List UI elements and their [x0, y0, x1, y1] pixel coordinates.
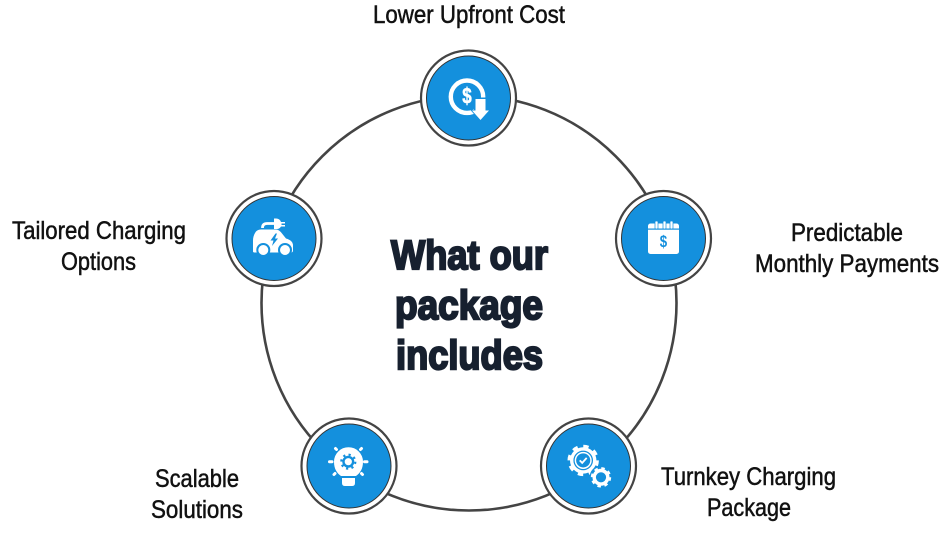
node: turnkey charging package [541, 418, 636, 514]
icon: gears with check [569, 446, 612, 489]
center title [391, 232, 548, 378]
label: predictable monthly payments [755, 219, 939, 278]
label: lower upfront cost: Lower Upfront Cost [373, 1, 565, 29]
icon: dollar with down arrow: $ [462, 84, 472, 109]
label: scalable solutions: Solutions [151, 496, 243, 524]
center title: package [395, 282, 543, 328]
label: turnkey charging package [661, 463, 836, 522]
center title: includes [396, 332, 543, 378]
large connecting circle [262, 96, 676, 510]
node: scalable solutions [302, 418, 396, 514]
label: tailored charging options [12, 217, 186, 276]
label: scalable solutions: Scalable [155, 465, 239, 493]
label: predictable monthly payments: Predictable [791, 219, 903, 247]
label: tailored charging options: Tailored Charging [12, 217, 186, 245]
icon: electric car with plug [253, 218, 293, 256]
label: tailored charging options: Options [61, 248, 136, 276]
node: predictable monthly payments [616, 191, 711, 286]
node: lower upfront cost [421, 50, 516, 146]
node: tailored charging options [226, 191, 322, 286]
label: turnkey charging package: Package [707, 494, 791, 522]
icon: calendar with dollar: $ [660, 233, 668, 251]
label: scalable solutions [151, 465, 243, 524]
label: turnkey charging package: Turnkey Charging [661, 463, 836, 491]
icon: light bulb with gear [330, 447, 367, 486]
center title: What our [391, 232, 548, 278]
